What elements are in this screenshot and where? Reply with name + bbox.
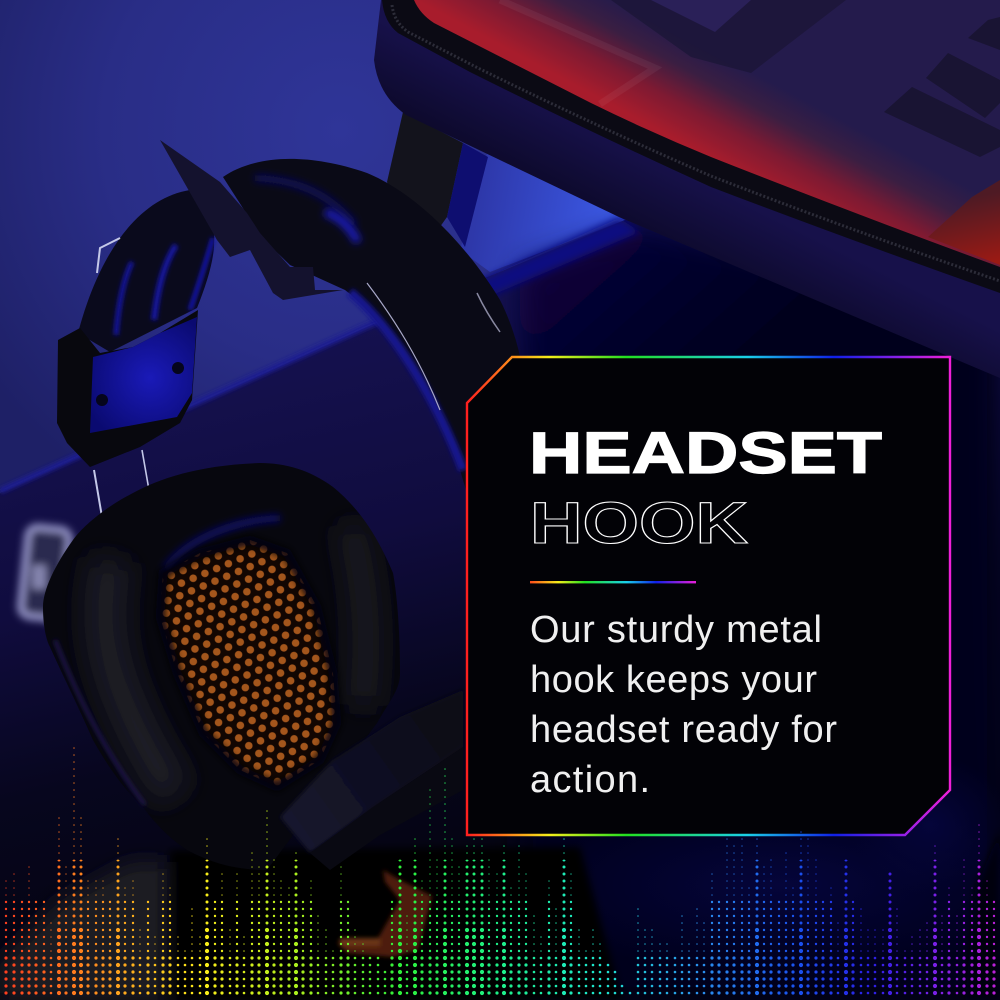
desk mat with red gradient [414, 0, 1000, 267]
dark lower photo area [0, 847, 622, 1000]
headband main arc [223, 159, 526, 540]
body text [530, 609, 837, 801]
metal hook [160, 140, 343, 300]
heading: HOOK: HOOK [530, 491, 748, 556]
earcup orange mesh [160, 540, 337, 787]
body text: hook keeps your [530, 659, 817, 701]
body text: Our sturdy metal [530, 609, 822, 651]
blurred desk gadget [19, 526, 71, 620]
orange chair part [337, 870, 432, 957]
desk stand bracket [387, 112, 488, 255]
stitched mat edge [382, 0, 1000, 293]
table frame [374, 0, 1000, 378]
yoke [57, 310, 198, 467]
headband left arc [78, 190, 214, 352]
info panel [467, 357, 950, 835]
bright wall glow near stand [460, 150, 625, 272]
body text: headset ready for [530, 709, 837, 751]
rainbow audio equalizer dots [6, 748, 994, 1000]
desk surface [0, 218, 1000, 1000]
metal wires [94, 238, 149, 517]
earcup cushion [43, 463, 400, 870]
body text: action. [530, 759, 650, 801]
rainbow divider [530, 581, 696, 583]
headband padded cushion [280, 690, 463, 870]
heading: HEADSET: HEADSET [529, 421, 882, 486]
